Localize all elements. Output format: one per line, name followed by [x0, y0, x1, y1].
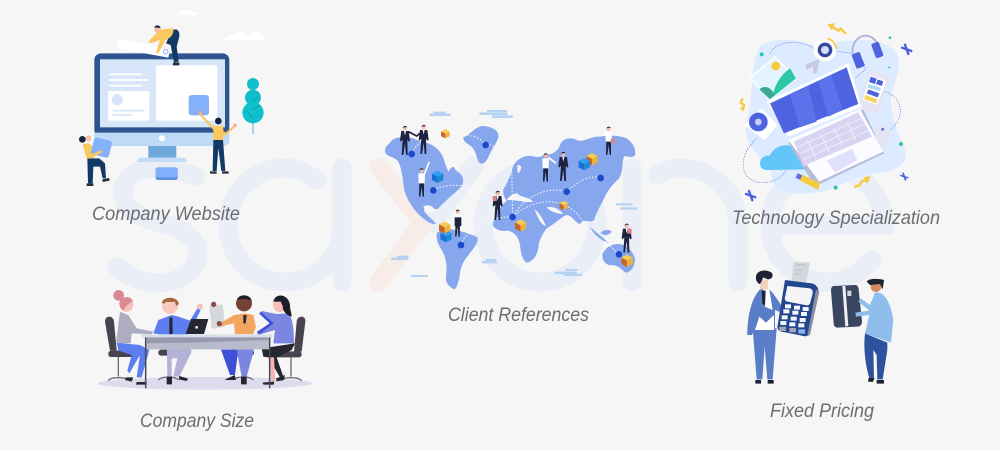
laptop [767, 63, 884, 184]
yellow arrows [741, 27, 867, 187]
camera [805, 39, 836, 73]
clouds [177, 10, 267, 40]
green dots [760, 36, 903, 190]
illustration: company website [79, 10, 267, 186]
business people [400, 125, 632, 253]
photo card [750, 57, 796, 100]
chairs [105, 317, 305, 381]
person on monitor with sheet [117, 25, 179, 65]
blue cross marks [746, 45, 911, 200]
monitor [94, 53, 229, 180]
label: fixed pricing: Fixed Pricing [770, 401, 874, 422]
dashed connectors [743, 42, 900, 183]
person: man with laptop [153, 298, 208, 384]
tree [242, 78, 264, 134]
floor shadow [97, 377, 313, 390]
disc card [744, 108, 777, 140]
cloud [760, 145, 807, 170]
person: man with paper [209, 295, 256, 384]
person with card [831, 279, 893, 384]
man with suit [747, 271, 785, 384]
background blob [746, 40, 906, 194]
person: woman left [113, 290, 153, 385]
sea cut-outs [423, 165, 563, 226]
ground shadow [730, 368, 903, 389]
label: technology specialization: Technology Specialization [732, 208, 940, 229]
route dashes [412, 133, 619, 254]
phone [859, 69, 890, 114]
usb drive [796, 173, 820, 190]
illustration: world map [385, 110, 637, 289]
person pointing at box [199, 111, 237, 174]
arrow heads [740, 23, 871, 184]
person: woman right [257, 296, 295, 385]
label: company size: Company Size [140, 411, 254, 432]
payment terminal [777, 280, 819, 336]
table [142, 334, 273, 388]
illustration: fixed pricing [730, 262, 903, 389]
location dots [408, 142, 622, 258]
boxes [432, 129, 633, 267]
label: client references: Client References [448, 305, 589, 326]
small clouds [391, 110, 637, 277]
illustration: technology specialization [740, 23, 911, 200]
watermark: saxone logotype [117, 166, 884, 283]
person carrying box [79, 135, 112, 186]
continents [385, 126, 635, 289]
headphones [851, 36, 884, 69]
mouse [874, 123, 891, 148]
receipt [792, 262, 810, 283]
label: company website: Company Website [92, 204, 240, 225]
illustration: company size [97, 290, 313, 390]
